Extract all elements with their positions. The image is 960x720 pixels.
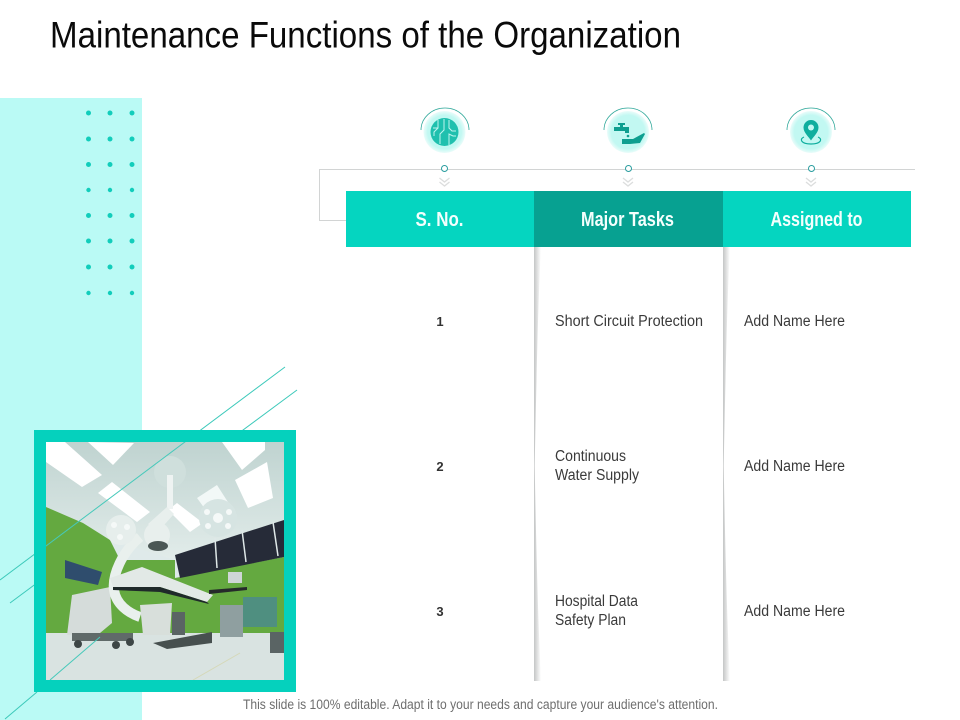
row 2: 2 [436, 459, 444, 474]
header cell: S. No.: S. No. [416, 209, 464, 231]
header cell: S. No. [346, 191, 534, 247]
background panel: left cyan band [0, 98, 142, 720]
connector node 3 [806, 166, 816, 186]
header cell: Assigned to [723, 191, 911, 247]
photo frame [34, 430, 296, 692]
column shadow: major tasks [534, 247, 541, 681]
row 2: Continuous [555, 448, 626, 465]
row 3: 3 [436, 604, 444, 619]
row 3: Safety Plan [555, 612, 626, 629]
row 3 [436, 593, 845, 629]
diagonal accent lines [0, 367, 297, 719]
connector node 2 [623, 166, 633, 186]
dot grid decoration [86, 110, 134, 295]
row 2: Add Name Here [744, 458, 845, 475]
row 2: Water Supply [555, 467, 639, 484]
header cell: Major Tasks [534, 191, 723, 247]
column shadow: assigned to [723, 247, 730, 681]
row 2 [436, 448, 845, 484]
photo: operating room [46, 442, 284, 680]
title: Maintenance Functions of the Organization [50, 14, 681, 56]
connector bracket lines [320, 170, 915, 220]
header cell: Assigned to: Assigned to [770, 209, 862, 231]
header cell: Major Tasks: Major Tasks [581, 209, 674, 231]
row 3: Hospital Data [555, 593, 638, 610]
connector node 1 [440, 166, 450, 186]
footer note: This slide is 100% editable. Adapt it to your needs and capture your audience's attention. [243, 697, 718, 712]
row 1 [436, 313, 845, 330]
icon: water tap and hand [604, 108, 652, 153]
row 1: Add Name Here [744, 313, 845, 330]
row 1: 1 [436, 314, 444, 329]
row 3: Add Name Here [744, 603, 845, 620]
icon: circuit board [421, 108, 469, 153]
row 1: Short Circuit Protection [555, 313, 703, 330]
icon: location pin [787, 108, 835, 153]
table [346, 191, 911, 681]
